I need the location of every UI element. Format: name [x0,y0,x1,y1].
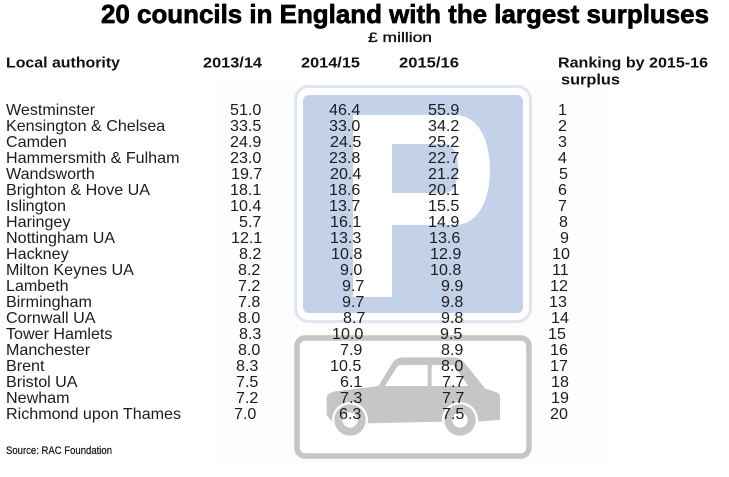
column: 2015/16 values: 13.6 [429,229,460,247]
column: ranking: 4 [558,149,567,167]
column: local authority names: Lambeth [6,277,69,295]
column: ranking: 5 [559,165,568,183]
column: 2015/16 values: 7.7 [442,389,464,407]
column: 2014/15 values [329,101,365,423]
column: 2014/15 values: 23.8 [329,149,360,167]
column: 2013/14 values: 8.3 [239,325,261,343]
column: 2015/16 values: 7.5 [442,405,464,423]
column: 2013/14 values [230,101,262,423]
column: 2014/15 values: 9.7 [342,277,364,295]
column: 2015/16 values: 9.9 [441,277,463,295]
column: ranking: 2 [558,117,567,135]
column: 2015/16 values: 10.8 [430,261,461,279]
column: 2014/15 values: 9.0 [340,261,362,279]
column: ranking: 6 [558,181,567,199]
column: 2013/14 values: 24.9 [230,133,261,151]
column: ranking: 3 [558,133,567,151]
column: 2013/14 values: 12.1 [231,229,262,247]
column: 2015/16 values: 20.1 [428,181,459,199]
column: local authority names: Milton Keynes UA [6,261,134,279]
column: 2015/16 values: 34.2 [428,117,459,135]
table header row [6,54,708,88]
column: local authority names: Birmingham [6,293,92,311]
column: ranking: 20 [550,405,568,423]
column: local authority names: Tower Hamlets [6,325,112,343]
table header row: surplus [561,72,620,88]
column: 2013/14 values: 8.0 [238,309,260,327]
column: local authority names: Camden [6,133,67,151]
column: 2014/15 values: 10.5 [330,357,361,375]
icon: car sign [297,338,529,456]
table header row: 2015/16 [399,54,459,72]
column: 2013/14 values: 8.3 [236,357,258,375]
column: 2013/14 values: 51.0 [230,101,261,119]
column: 2013/14 values: 18.1 [230,181,261,199]
column: 2013/14 values: 23.0 [230,149,261,167]
column: 2014/15 values: 10.0 [332,325,363,343]
column: 2014/15 values: 16.1 [330,213,361,231]
column: local authority names: Brighton & Hove UA [6,181,150,199]
column: local authority names: Manchester [6,341,91,359]
column: local authority names: Hammersmith & Fulham [6,149,180,167]
column: local authority names: Hackney [6,245,70,263]
column: 2014/15 values: 6.3 [339,405,361,423]
column: 2015/16 values: 22.7 [428,149,459,167]
column: 2013/14 values: 19.7 [231,165,262,183]
column: local authority names: Richmond upon Thames [6,405,181,423]
table header row: Ranking by 2015-16 [558,54,708,72]
column: 2014/15 values: 7.3 [340,389,362,407]
column: 2013/14 values: 8.2 [239,245,261,263]
column: 2015/16 values: 9.8 [441,293,463,311]
column: 2015/16 values: 15.5 [428,197,459,215]
column: 2013/14 values: 33.5 [230,117,261,135]
column: 2014/15 values: 13.7 [329,197,360,215]
table header row: 2014/15 [301,54,360,72]
column: local authority names: Bristol UA [6,373,78,391]
column: ranking: 15 [548,325,566,343]
column: 2015/16 values: 25.2 [428,133,459,151]
column: ranking: 11 [552,261,569,279]
subtitle: unit: £ million [368,29,432,45]
column: ranking: 10 [552,245,570,263]
column: local authority names: Islington [6,197,66,215]
column: 2014/15 values: 6.1 [340,373,362,391]
column: 2013/14 values: 7.0 [234,405,256,423]
column: 2015/16 values: 55.9 [428,101,459,119]
icon: parking sign [296,86,530,322]
column: ranking [548,101,570,423]
column: ranking: 16 [550,341,568,359]
column: 2014/15 values: 9.7 [342,293,364,311]
column: local authority names: Kensington & Chelsea [6,117,165,135]
column: local authority names [6,101,181,423]
column: ranking: 13 [549,293,567,311]
column: 2015/16 values: 7.7 [442,373,464,391]
table header row: Local authority [6,54,121,72]
column: 2013/14 values: 7.2 [236,389,258,407]
column: local authority names: Brent [6,357,45,375]
column: ranking: 18 [551,373,569,391]
column: ranking: 14 [551,309,569,327]
column: ranking: 17 [550,357,568,375]
column: local authority names: Haringey [6,213,71,231]
column: local authority names: Newham [6,389,70,407]
column: local authority names: Cornwall UA [6,309,96,327]
column: 2015/16 values: 8.9 [441,341,463,359]
column: 2015/16 values: 21.2 [428,165,459,183]
column: ranking: 8 [559,213,568,231]
column: 2014/15 values: 7.9 [340,341,362,359]
column: ranking: 9 [560,229,569,247]
column: 2013/14 values: 5.7 [239,213,261,231]
column: ranking: 1 [558,101,567,119]
column: 2015/16 values: 9.8 [441,309,463,327]
source note: Source: RAC Foundation [6,445,112,457]
column: 2013/14 values: 8.0 [238,341,260,359]
column: ranking: 7 [558,197,567,215]
column: 2014/15 values: 33.0 [329,117,360,135]
column: 2014/15 values: 13.3 [330,229,361,247]
column: 2014/15 values: 46.4 [329,101,360,119]
column: 2015/16 values [428,101,464,423]
column: 2013/14 values: 7.8 [238,293,260,311]
table header row: 2013/14 [203,54,263,72]
column: 2013/14 values: 10.4 [230,197,261,215]
column: ranking: 12 [550,277,568,295]
column: 2013/14 values: 7.5 [236,373,258,391]
column: local authority names: Nottingham UA [6,229,115,247]
column: 2015/16 values: 9.5 [440,325,462,343]
column: 2014/15 values: 10.8 [331,245,362,263]
column: 2014/15 values: 20.4 [330,165,361,183]
column: 2013/14 values: 7.2 [238,277,260,295]
column: 2015/16 values: 8.0 [441,357,463,375]
column: 2014/15 values: 18.6 [329,181,360,199]
column: 2015/16 values: 12.9 [430,245,461,263]
column: ranking: 19 [551,389,569,407]
column: 2013/14 values: 8.2 [238,261,260,279]
column: local authority names: Wandsworth [6,165,95,183]
column: local authority names: Westminster [6,101,96,119]
column: 2014/15 values: 24.5 [330,133,361,151]
column: 2014/15 values: 8.7 [343,309,365,327]
column: 2015/16 values: 14.9 [428,213,459,231]
